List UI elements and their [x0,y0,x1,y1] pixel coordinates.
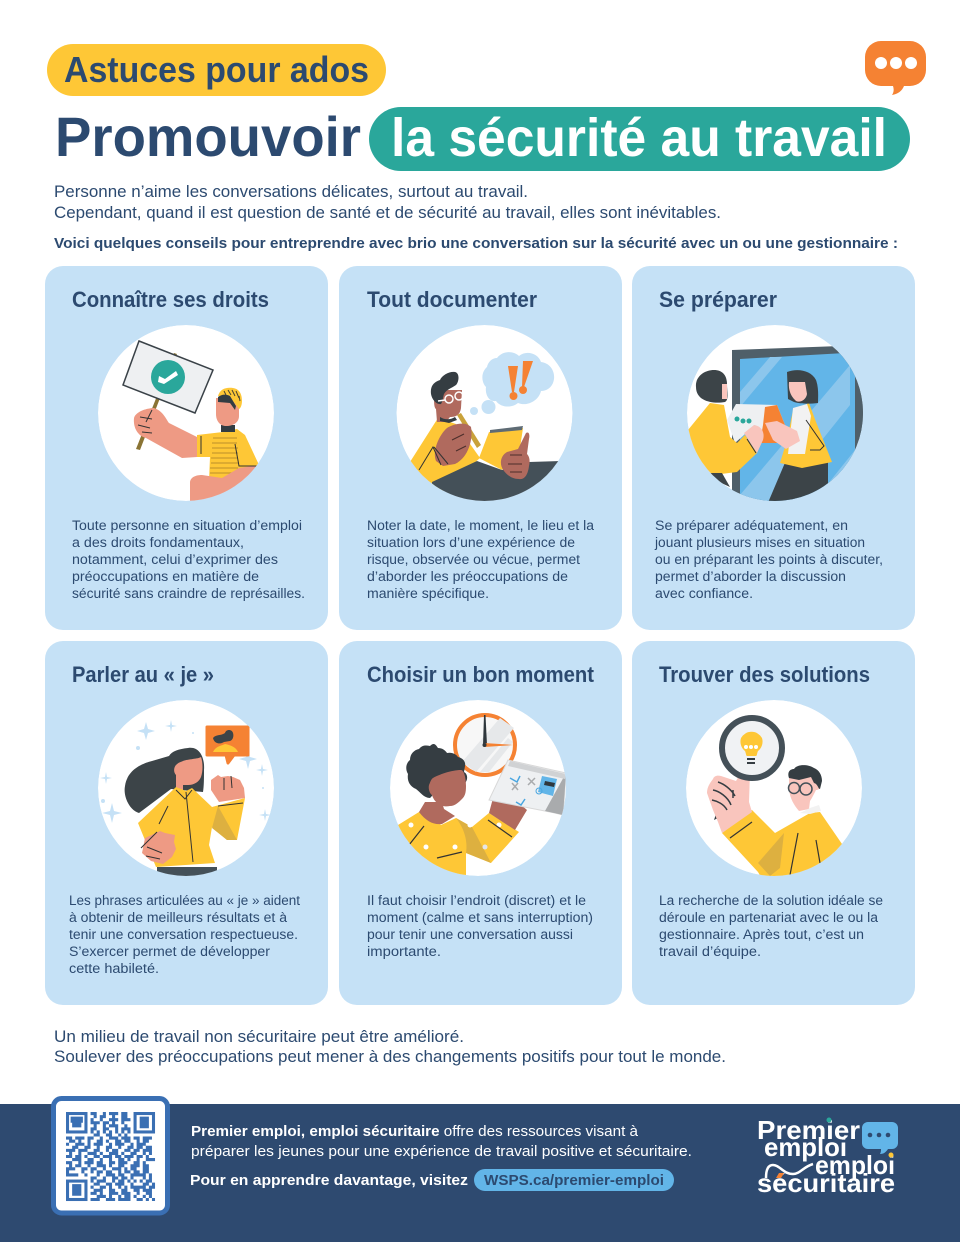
text: Se préparer: ou en préparant les points à discuter, [655,552,883,567]
intro text: Voici quelques conseils pour entreprendre avec brio une conversation sur la sécurité avec un ou une gestionnaire : [54,235,898,252]
text: Choisir un bon moment: pour tenir une conversation aussi [367,927,573,942]
illustration: person holding a sign [98,325,274,510]
text: Choisir un bon moment: Il faut choisir l’endroit (discret) et le [367,893,586,908]
link pill [474,1169,674,1191]
text: Tout documenter: Noter la date, le moment, le lieu et la [367,518,594,533]
footer text: préparer les jeunes pour une expérience de travail positive et sécuritaire. [191,1144,692,1160]
text: Parler au « je »: à obtenir de meilleurs résultats et à [69,910,288,925]
panel: Connaître ses droits [45,266,328,630]
logo: Premier emploi, emploi sécuritaire: emploi [764,1132,847,1162]
text: Connaître ses droits: a des droits fondamentaux, [72,535,244,550]
title: la sécurité au travail [391,108,887,168]
footer text [190,1124,692,1189]
footer band [0,1098,960,1242]
footer text: Pour en apprendre davantage, visitez [190,1172,468,1189]
logo: Premier emploi, emploi sécuritaire: Premier [757,1115,860,1145]
closing text [54,1027,726,1066]
text: Tout documenter: risque, observée ou vécue, permet [367,552,580,567]
footer text: Premier emploi, emploi sécuritaire offre des ressources visant à [191,1124,639,1140]
text: Tout documenter [367,518,594,601]
text: Parler au « je »: Les phrases articulées au « je » aident [69,893,300,908]
panel: Trouver des solutions: Trouver des solutions [659,662,870,687]
text: Connaître ses droits: préoccupations en matière de [72,569,259,584]
text: Tout documenter: manière spécifique. [367,586,489,601]
panel: Parler au « je » [45,641,328,1005]
QR code [54,1098,168,1213]
link pill: WSPS.ca/premier-emploi [484,1173,664,1189]
closing text: Soulever des préoccupations peut mener à des changements positifs pour tout le monde. [54,1047,726,1066]
text: Se préparer: Se préparer adéquatement, en [655,518,848,533]
panel: Tout documenter: Tout documenter [367,287,537,312]
intro text [54,182,898,252]
panel: Choisir un bon moment [339,641,622,1005]
text: Tout documenter: situation lors d’une expérience de [367,535,575,550]
logo: Premier emploi, emploi sécuritaire [757,1115,898,1198]
text: Se préparer [654,518,883,601]
text: Choisir un bon moment: importante. [367,944,441,959]
icon: orange speech bubble [865,41,926,95]
panel: Parler au « je »: Parler au « je » [72,662,214,687]
illustration: woman with clock and calendar [380,700,566,876]
text: Connaître ses droits: notamment, celui d’exprimer des [72,552,278,567]
panel: Se préparer [632,266,915,630]
panel: Connaître ses droits: Connaître ses droits [72,287,269,312]
illustration: two people rehearsing at a mirror [685,325,865,511]
closing text: Un milieu de travail non sécuritaire peut être amélioré. [54,1027,464,1046]
text: Trouver des solutions: travail d’équipe. [659,944,761,959]
title [55,105,910,171]
logo: Premier emploi, emploi sécuritaire: emploi [815,1150,895,1180]
text: Parler au « je »: cette habileté. [69,961,159,976]
badge: Astuces pour ados: Astuces pour ados [64,49,369,90]
text: Trouver des solutions: La recherche de la solution idéale se [659,893,883,908]
illustration: person thinking with a notepad [396,325,572,511]
text: Choisir un bon moment: moment (calme et sans interruption) [367,910,593,925]
text: Parler au « je » [69,893,300,976]
panel: Tout documenter [339,266,622,630]
text: Connaître ses droits: Toute personne en situation d’emploi [72,518,302,533]
text: Parler au « je »: tenir une conversation respectueuse. [69,927,298,942]
icon: clock [455,715,515,775]
text: Connaître ses droits [72,518,305,601]
illustration: man with magnifying glass [686,700,862,884]
text: Se préparer: jouant plusieurs mises en situation [654,535,865,550]
illustration: woman speaking [98,700,274,877]
text: Trouver des solutions [659,893,883,959]
logo: Premier emploi, emploi sécuritaire: sécuritaire [757,1168,895,1198]
text: Tout documenter: d’aborder les préoccupations de [367,569,568,584]
panel: Trouver des solutions [632,641,915,1005]
title: Promouvoir [55,105,361,168]
text: Se préparer: permet d’aborder la discussion [655,569,846,584]
text: Se préparer: avec confiance. [655,586,753,601]
text: Parler au « je »: S’exercer permet de développer [69,944,271,959]
panel: Se préparer: Se préparer [659,287,777,312]
text: Choisir un bon moment [367,893,593,959]
panel: Choisir un bon moment: Choisir un bon moment [367,662,595,687]
intro text: Personne n’aime les conversations délicates, surtout au travail. [54,182,528,201]
intro text: Cependant, quand il est question de santé et de sécurité au travail, elles sont inévitables. [54,203,721,222]
text: Connaître ses droits: sécurité sans craindre de représailles. [72,586,305,601]
text: Trouver des solutions: déroule en partenariat avec le ou la [659,910,878,925]
text: Trouver des solutions: gestionnaire. Après tout, c’est un [659,927,864,942]
